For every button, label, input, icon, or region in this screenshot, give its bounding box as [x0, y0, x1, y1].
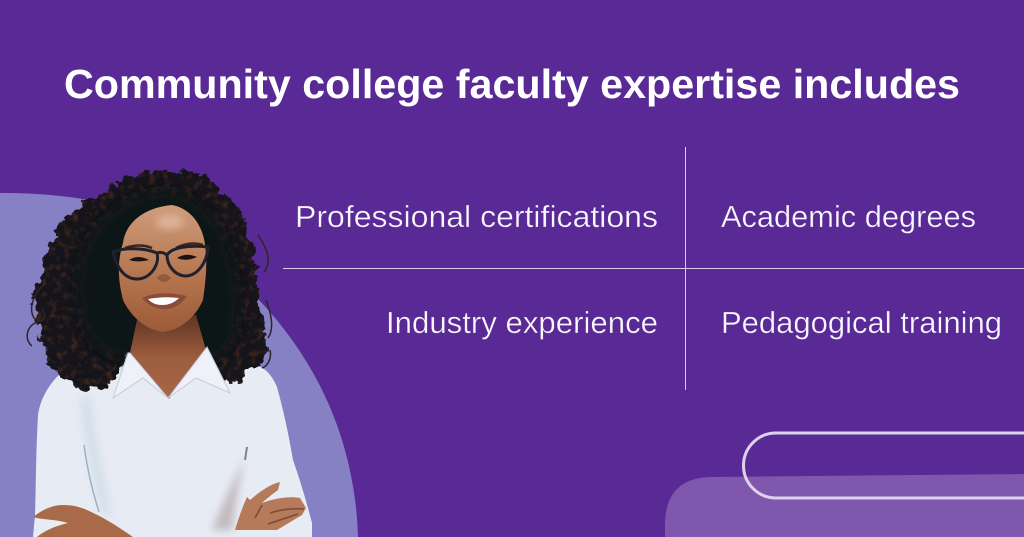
- label: professional certifications: Professional certifications: [295, 200, 658, 234]
- bottom right rounded block: [665, 474, 1024, 537]
- curly hair: [27, 170, 272, 390]
- neck: [130, 315, 206, 399]
- shirt shading: [80, 395, 112, 518]
- label: academic degrees: Academic degrees: [721, 200, 976, 234]
- outlined pill: [744, 433, 1024, 498]
- eyes: [129, 255, 197, 262]
- grid of expertise areas: [283, 147, 1024, 390]
- shirt: [33, 350, 312, 537]
- glasses: [113, 246, 208, 279]
- lavender backdrop shape: [0, 193, 358, 537]
- right hand: [235, 482, 306, 530]
- crossed arms and hands: [33, 482, 306, 537]
- shirt collar: [113, 347, 230, 398]
- portrait: smiling woman with glasses and white shirt: [27, 170, 312, 537]
- label: industry experience: Industry experience: [386, 306, 658, 340]
- title: Community college faculty expertise includes: [64, 61, 960, 107]
- loose curls: [27, 235, 272, 368]
- divider: vertical: [685, 147, 686, 390]
- eyebrows: [125, 244, 203, 248]
- left hand: [33, 505, 133, 537]
- mouth: [142, 293, 187, 309]
- divider: horizontal: [283, 268, 1024, 269]
- label: pedagogical training: Pedagogical training: [721, 306, 1002, 340]
- nose: [157, 274, 171, 282]
- forehead highlight: [156, 215, 184, 229]
- face: [119, 205, 206, 332]
